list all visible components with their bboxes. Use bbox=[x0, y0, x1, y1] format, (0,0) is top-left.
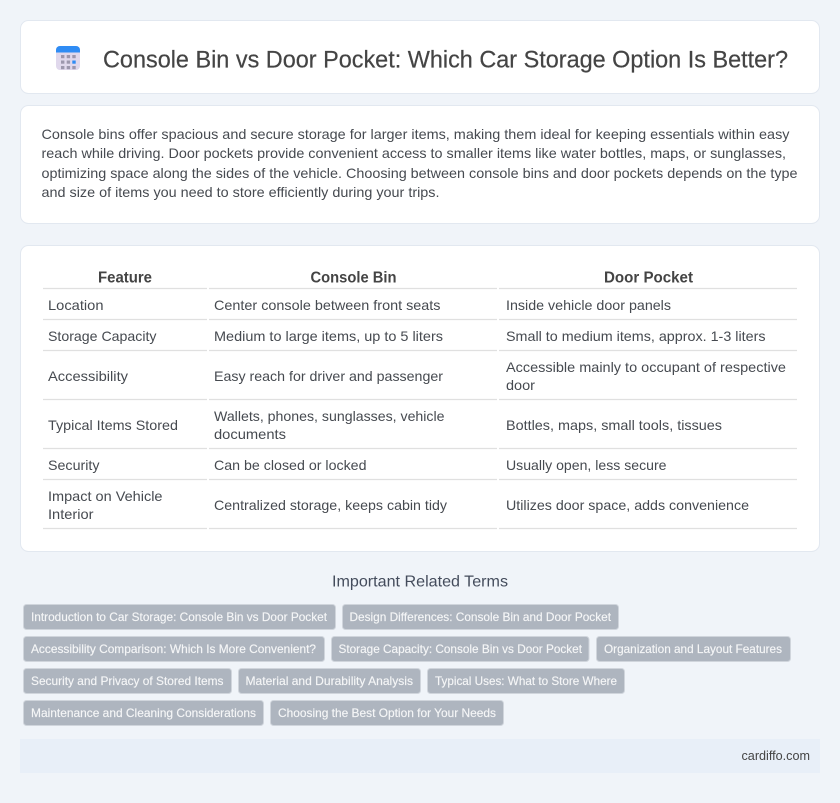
heading: important related terms: Important Related Terms bbox=[332, 574, 508, 591]
tag bbox=[238, 668, 420, 694]
tag: Organization and Layout Features bbox=[604, 642, 782, 656]
tag: Accessibility Comparison: Which Is More Convenient? bbox=[31, 642, 316, 656]
table row: storage capacity: Medium to large items, up to 5 liters bbox=[214, 328, 443, 344]
tag bbox=[24, 636, 324, 662]
table row: security bbox=[48, 457, 667, 473]
table header row: Door Pocket bbox=[604, 270, 694, 286]
table row: typical items stored: Typical Items Stored bbox=[48, 417, 178, 433]
tag: Security and Privacy of Stored Items bbox=[31, 674, 224, 688]
tag bbox=[332, 636, 589, 662]
tag bbox=[270, 700, 504, 726]
table row: location: Location bbox=[48, 297, 104, 313]
tag bbox=[24, 668, 232, 694]
panel: comparison table bbox=[20, 246, 820, 552]
tag bbox=[428, 668, 624, 694]
table row: security: Can be closed or locked bbox=[214, 457, 366, 473]
table row: security: Usually open, less secure bbox=[506, 457, 667, 473]
table row: typical items stored: Bottles, maps, small tools, tissues bbox=[506, 417, 722, 433]
table row: typical items stored: documents bbox=[214, 426, 286, 442]
footer bbox=[20, 739, 820, 773]
table row: storage capacity bbox=[48, 328, 766, 344]
tag bbox=[24, 604, 336, 630]
table row: impact on vehicle interior: Impact on Vehicle bbox=[48, 488, 163, 504]
tag: Introduction to Car Storage: Console Bin vs Door Pocket bbox=[31, 610, 328, 624]
tag list: related terms bbox=[24, 604, 790, 726]
table row: accessibility: Accessibility bbox=[48, 368, 128, 384]
text block: introduction paragraph: Console bins offer spacious and secure storage for larger items, making them ideal for keeping essentials within easy bbox=[42, 126, 790, 142]
table row: location: Inside vehicle door panels bbox=[506, 297, 671, 313]
table header row: Console Bin bbox=[310, 270, 396, 286]
title: Console Bin vs Door Pocket: Which Car Storage Option Is Better? bbox=[103, 46, 788, 74]
table row: location: Center console between front seats bbox=[214, 297, 440, 313]
tag bbox=[596, 636, 790, 662]
tag bbox=[24, 700, 264, 726]
table row: accessibility: door bbox=[506, 377, 535, 393]
table row: impact on vehicle interior bbox=[48, 488, 749, 522]
table row: accessibility: Accessible mainly to occupant of respective bbox=[506, 359, 786, 375]
tag: Storage Capacity: Console Bin vs Door Pocket bbox=[338, 642, 583, 656]
table row: accessibility: Easy reach for driver and passenger bbox=[214, 368, 443, 384]
table row: typical items stored: Wallets, phones, sunglasses, vehicle bbox=[214, 408, 445, 424]
table row: impact on vehicle interior: Utilizes door space, adds convenience bbox=[506, 497, 749, 513]
table row: accessibility bbox=[48, 359, 786, 393]
table row: location bbox=[48, 297, 671, 313]
tag: Typical Uses: What to Store Where bbox=[435, 674, 617, 688]
table row: typical items stored bbox=[48, 408, 722, 442]
table row: storage capacity: Storage Capacity bbox=[48, 328, 156, 344]
table header row bbox=[98, 270, 694, 286]
tag: Choosing the Best Option for Your Needs bbox=[278, 706, 496, 720]
text block: introduction paragraph: optimizing space along the sides of the vehicle. Choosing between console bins and door pockets depends on the type bbox=[42, 165, 798, 181]
tag: Material and Durability Analysis bbox=[246, 674, 413, 688]
panel: introduction bbox=[20, 106, 820, 224]
icon: calendar bbox=[56, 46, 80, 70]
tag: Design Differences: Console Bin and Door Pocket bbox=[350, 610, 612, 624]
panel: title header bbox=[20, 20, 820, 94]
tag bbox=[342, 604, 618, 630]
text block: introduction paragraph: and size of items you need to store efficiently during your trips. bbox=[42, 184, 440, 200]
table row: impact on vehicle interior: Centralized storage, keeps cabin tidy bbox=[214, 497, 447, 513]
table row: impact on vehicle interior: Interior bbox=[48, 506, 94, 522]
footer brand: cardiffo.com bbox=[742, 749, 810, 763]
table row: storage capacity: Small to medium items, approx. 1-3 liters bbox=[506, 328, 766, 344]
text block: introduction paragraph: reach while driving. Door pockets provide convenient access to smaller items like water bottles, maps, or sunglasses, bbox=[42, 145, 786, 161]
text block: introduction paragraph bbox=[42, 126, 798, 200]
table row: security: Security bbox=[48, 457, 100, 473]
table header row: Feature bbox=[98, 270, 152, 286]
tag: Maintenance and Cleaning Considerations bbox=[31, 706, 256, 720]
